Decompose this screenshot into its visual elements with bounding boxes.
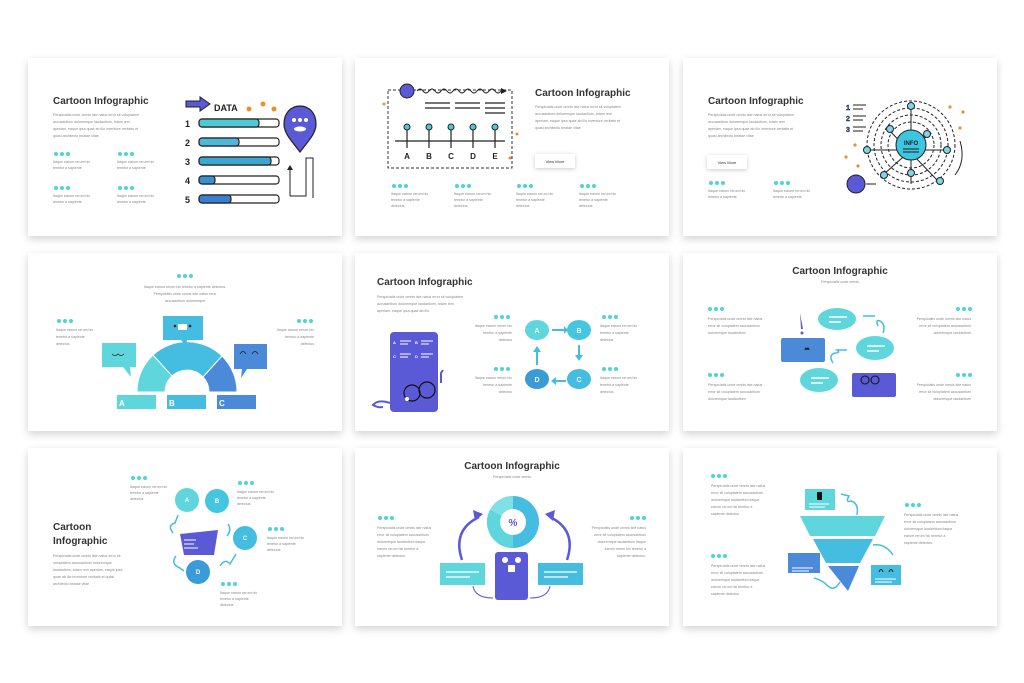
slide 6: speech bubbles: Perspiciatis unde omnis — [821, 280, 859, 284]
slide 1: data bars: Itaque earum rerum hic — [117, 194, 154, 198]
text blocks: error sit voluptatem accusantium — [708, 390, 760, 394]
cycle diagram: C — [576, 377, 582, 384]
cards — [788, 489, 901, 588]
slide 1: data bars: tenetur a sapiente — [53, 166, 82, 170]
icon: arrow DATA — [186, 97, 276, 113]
text blocks: Perspiciatis unde omnis iste natus — [592, 526, 646, 530]
slide 5: ABCD cycle — [355, 253, 669, 431]
timeline diagram: C — [448, 152, 454, 161]
slide 2: timeline — [355, 58, 669, 236]
text blocks: Perspiciatis unde omnis iste natus — [904, 513, 959, 517]
top text block: accusantium doloremque — [165, 299, 205, 303]
text blocks: doloremque laudantium — [708, 397, 746, 401]
labels A B C — [117, 395, 256, 409]
slide 8: percentage donut — [355, 448, 669, 626]
text blocks: earum rerum hic tenetur a — [711, 505, 752, 509]
text blocks: delectus — [267, 548, 281, 552]
top text block: Itaque earum rerum hic tenetur a sapiente delectus. — [144, 285, 226, 289]
circles diagram — [170, 488, 257, 584]
bar chart: 1 — [185, 119, 190, 129]
circles diagram: A — [185, 498, 190, 504]
feature dots — [391, 184, 616, 208]
circles diagram: C — [243, 536, 248, 542]
text blocks: error sit voluptatem accusantium — [711, 491, 763, 495]
bar chart — [185, 119, 279, 205]
slide 1: data bars: tenetur a sapiente — [117, 200, 146, 204]
paragraph: Perspiciatis unde omnis iste natus error sit voluptatem — [377, 295, 463, 299]
paragraph — [377, 295, 463, 313]
paragraph — [708, 113, 794, 138]
paragraph: accusantium doloremque laudantium, totam rem — [708, 120, 785, 124]
feature dots: tenetur a sapiente — [454, 198, 483, 202]
text blocks: sapiente delectus — [711, 592, 739, 596]
feature dots: Itaque earum rerum hic — [579, 192, 616, 196]
feature dots: tenetur a sapiente — [391, 198, 420, 202]
text blocks: sapiente delectus. — [904, 541, 933, 545]
text blocks: doloremque laudantium — [708, 331, 746, 335]
feature dots: tenetur a sapiente — [773, 195, 802, 199]
paragraph: accusantium doloremque laudantium, totam rem — [535, 112, 612, 116]
character — [495, 552, 528, 600]
text blocks: earum rerum hic tenetur a — [904, 534, 945, 538]
paragraph: quasi architecto beatae vitae — [708, 134, 754, 138]
paragraph: quasi architecto beatae vitae — [535, 126, 581, 130]
paragraph — [53, 554, 122, 586]
text blocks: error sit voluptatem accusantium — [711, 571, 763, 575]
text blocks: error sit voluptatem accusantium — [708, 324, 760, 328]
right text blocks: delectus — [600, 390, 614, 394]
cycle diagram: A — [534, 328, 540, 335]
left text blocks: delectus — [499, 338, 512, 342]
feature dots: Itaque earum rerum hic — [391, 192, 428, 196]
circles diagram: D — [196, 570, 201, 576]
feature dots: tenetur a sapiente — [579, 198, 608, 202]
icon: balloon — [284, 106, 316, 198]
paragraph: aperiam, eaque ipsa quae ab illo inventore veritatis et — [53, 127, 138, 131]
text blocks: delectus — [220, 603, 234, 607]
character: book — [373, 332, 443, 412]
paragraph — [53, 113, 139, 138]
slide 8: percentage donut: Perspiciatis unde omnis — [493, 475, 531, 479]
title: Cartoon Infographic — [535, 88, 631, 99]
character: book: A — [393, 340, 396, 345]
button: view more — [535, 154, 575, 168]
info boxes — [440, 563, 583, 598]
feature dots: Itaque earum rerum hic — [516, 192, 553, 196]
labels A B C: B — [169, 399, 175, 408]
text blocks: earum rerum hic tenetur a — [711, 585, 752, 589]
text blocks: Perspiciatis unde omnis iste natus — [917, 317, 971, 321]
slide 1: data bars — [28, 58, 342, 236]
text blocks: Itaque earum rerum hic — [220, 591, 257, 595]
title: Infographic — [53, 536, 108, 547]
circles diagram: B — [215, 499, 220, 505]
timeline diagram: E — [492, 152, 498, 161]
slide 9: funnel — [683, 448, 997, 626]
text blocks: doloremque laudantium itaque — [598, 540, 646, 544]
text blocks: tenetur a sapiente — [237, 496, 266, 500]
speech bubbles — [102, 316, 267, 378]
half donut chart — [137, 342, 237, 392]
character: book: C — [393, 354, 396, 359]
left text blocks: delectus — [499, 390, 512, 394]
feature dots: delectus — [391, 204, 405, 208]
feature dots — [54, 152, 134, 190]
top text block — [144, 274, 226, 303]
bar chart: 2 — [185, 138, 190, 148]
button: view more: View More — [718, 160, 737, 165]
target diagram — [844, 101, 965, 193]
feature dots: delectus — [516, 204, 530, 208]
timeline diagram: D — [470, 152, 476, 161]
slide 6: speech bubbles — [683, 253, 997, 431]
paragraph: accusantium doloremque laudantium, totam rem — [377, 302, 454, 306]
arrows — [459, 517, 570, 560]
text blocks: tenetur a sapiente — [130, 491, 159, 495]
text blocks: error sit voluptatem accusantium — [594, 533, 646, 537]
text blocks: Perspiciatis unde omnis iste natus — [711, 564, 766, 568]
slide 3: info target — [683, 58, 997, 236]
text blocks: Perspiciatis unde omnis iste natus — [708, 317, 763, 321]
character: book: B — [415, 340, 418, 345]
right text blocks: Itaque earum rerum hic — [600, 376, 637, 380]
title: Cartoon — [53, 522, 91, 533]
right text block: Itaque earum rerum hic — [277, 328, 314, 332]
left text block: tenetur a sapiente — [56, 335, 85, 339]
slide 1: data bars: tenetur a sapiente — [117, 166, 146, 170]
timeline diagram — [382, 84, 518, 168]
paragraph: Perspiciatis unde omnis iste natus error sit voluptatem — [535, 105, 621, 109]
slide 7: ABCD around card — [28, 448, 342, 626]
paragraph: quasi architecto beatae vitae — [53, 134, 99, 138]
paragraph: aperiam, eaque ipsa quae ab illo inventore veritatis et — [535, 119, 620, 123]
left text blocks: tenetur a sapiente — [483, 383, 512, 387]
paragraph: quae ab illo inventore veritatis et quasi — [53, 575, 114, 579]
right text blocks: tenetur a sapiente — [600, 383, 629, 387]
text blocks: error sit voluptatem accusantium — [377, 533, 429, 537]
text blocks: error sit voluptatem accusantium — [904, 520, 956, 524]
cycle diagram — [525, 320, 591, 389]
left text blocks: Itaque earum rerum hic — [475, 376, 512, 380]
feature dots — [708, 181, 810, 199]
left text block: delectus — [56, 342, 70, 346]
title — [53, 522, 108, 547]
left text blocks — [475, 315, 512, 394]
text blocks: doloremque laudantium itaque — [711, 498, 759, 502]
feature dots: Itaque earum rerum hic — [454, 192, 491, 196]
text blocks: doloremque laudantium — [933, 397, 971, 401]
target diagram: 2 — [846, 116, 850, 123]
text blocks: Itaque earum rerum hic — [237, 490, 274, 494]
target diagram: INFO — [904, 141, 918, 147]
bar chart: 4 — [185, 176, 190, 186]
text blocks: doloremque laudantium itaque — [377, 540, 425, 544]
text blocks: Itaque earum rerum hic — [130, 485, 167, 489]
text blocks: earum rerum hic tenetur a — [377, 547, 418, 551]
slide 1: data bars: Itaque earum rerum hic — [53, 194, 90, 198]
slide 1: data bars: tenetur a sapiente — [53, 200, 82, 204]
text blocks: tenetur a sapiente — [267, 542, 296, 546]
feature dots: delectus — [579, 204, 593, 208]
title: Cartoon Infographic — [792, 266, 888, 277]
text blocks: Itaque earum rerum hic — [267, 536, 304, 540]
donut chart — [487, 496, 539, 548]
left text blocks: Itaque earum rerum hic — [475, 324, 512, 328]
text blocks — [377, 516, 646, 558]
labels A B C: A — [119, 399, 125, 408]
slide 4: half donut — [28, 253, 342, 431]
paragraph: voluptatem accusantium doloremque — [53, 561, 112, 565]
left text blocks: tenetur a sapiente — [483, 331, 512, 335]
right text block: delectus — [301, 342, 314, 346]
right text blocks: delectus — [600, 338, 614, 342]
paragraph: laudantium, totam rem aperiam, eaque ipsa — [53, 568, 122, 572]
right text blocks — [600, 315, 637, 394]
left text block: Itaque earum rerum hic — [56, 328, 93, 332]
text blocks: delectus — [237, 502, 251, 506]
text blocks: Perspiciatis unde omnis iste natus — [377, 526, 432, 530]
target diagram: 3 — [846, 127, 850, 134]
slide 1: data bars: Itaque earum rerum hic — [53, 160, 90, 164]
paragraph — [535, 105, 621, 130]
paragraph: aperiam, eaque ipsa quae ab illo inventore veritatis et — [708, 127, 793, 131]
feature dots: tenetur a sapiente — [708, 195, 737, 199]
paragraph: Perspiciatis unde omnis iste natus error sit voluptatem — [53, 113, 139, 117]
top text block: Perspiciatis unde omnis iste natus error — [154, 292, 217, 296]
text blocks: doloremque laudantium itaque — [711, 578, 759, 582]
right text block — [277, 319, 314, 346]
right text block: tenetur a sapiente — [285, 335, 314, 339]
text blocks: doloremque laudantium — [933, 331, 971, 335]
title: Cartoon Infographic — [708, 96, 804, 107]
paragraph: Perspiciatis unde omnis iste natus error sit voluptatem — [708, 113, 794, 117]
text blocks: Perspiciatis unde omnis iste natus — [711, 484, 766, 488]
text blocks: doloremque laudantium itaque — [904, 527, 952, 531]
icon: arrow DATA: DATA — [214, 103, 238, 113]
bubbles illustration — [781, 308, 896, 397]
left text block — [56, 319, 93, 346]
paragraph: aperiam, eaque ipsa quae ab illo. — [377, 309, 430, 313]
right text blocks: tenetur a sapiente — [600, 331, 629, 335]
button: view more: View More — [546, 159, 565, 164]
text blocks: sapiente delectus — [711, 512, 739, 516]
title: Cartoon Infographic — [53, 96, 149, 107]
text blocks: error sit voluptatem accusantium — [919, 390, 971, 394]
text blocks — [130, 476, 304, 607]
text blocks: error sit voluptatem accusantium — [919, 324, 971, 328]
text blocks: delectus — [130, 497, 144, 501]
slide 1: data bars: Itaque earum rerum hic — [117, 160, 154, 164]
timeline diagram: A — [404, 152, 410, 161]
text blocks: Perspiciatis unde omnis iste natus — [708, 383, 763, 387]
right text blocks: Itaque earum rerum hic — [600, 324, 637, 328]
feature dots: delectus — [454, 204, 468, 208]
bar chart: 5 — [185, 195, 190, 205]
title: Cartoon Infographic — [464, 461, 560, 472]
feature dots: Itaque earum rerum hic — [708, 189, 745, 193]
feature dots: Itaque earum rerum hic — [773, 189, 810, 193]
button: view more — [707, 155, 747, 169]
paragraph: accusantium doloremque laudantium, totam rem — [53, 120, 130, 124]
bar chart: 3 — [185, 157, 190, 167]
text blocks: Perspiciatis unde omnis iste natus — [917, 383, 971, 387]
cycle diagram: B — [576, 328, 582, 335]
feature dots: tenetur a sapiente — [516, 198, 545, 202]
text blocks — [708, 307, 972, 401]
target diagram: 1 — [846, 105, 850, 112]
paragraph: Perspiciatis unde omnis iste natus error sit — [53, 554, 121, 558]
text blocks: earum rerum hic tenetur a — [605, 547, 646, 551]
text blocks: tenetur a sapiente — [220, 597, 249, 601]
labels A B C: C — [219, 399, 225, 408]
text blocks: sapiente delectus. — [377, 554, 406, 558]
paragraph: architecto beatae vitae — [53, 582, 89, 586]
character: book: D — [415, 354, 418, 359]
funnel chart — [800, 516, 885, 591]
text blocks: sapiente delectus. — [617, 554, 646, 558]
cycle diagram: D — [534, 377, 540, 384]
donut chart: % — [509, 518, 518, 529]
timeline diagram: B — [426, 152, 432, 161]
title: Cartoon Infographic — [377, 277, 473, 288]
text blocks — [711, 474, 959, 596]
